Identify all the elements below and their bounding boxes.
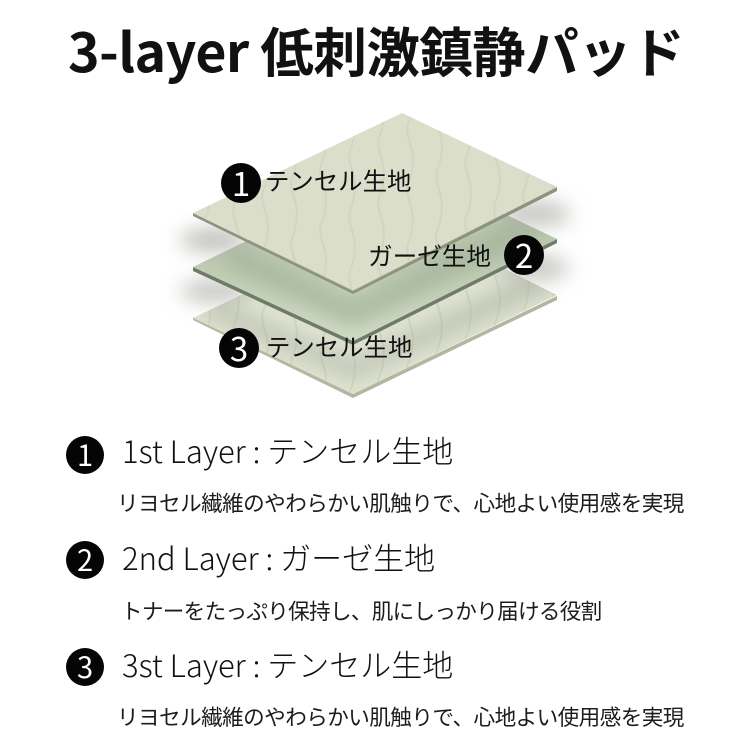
- title: 3-layer 低刺激鎮静パッド: [68, 11, 684, 88]
- shadow under layer 2: [180, 280, 252, 302]
- diagram label 2: ガーゼ生地: [368, 237, 491, 273]
- item 1: [66, 427, 684, 518]
- diagram label 3: 3: [230, 323, 248, 371]
- diagram label 1: 1: [232, 158, 250, 206]
- diagram label 2: [368, 230, 544, 278]
- shadow under layer 1: [180, 229, 248, 251]
- item 3 heading: 3st Layer : テンセル生地: [122, 641, 453, 686]
- diagram label 2: 2: [515, 230, 533, 278]
- icon: number 2: [66, 541, 104, 579]
- icon: number 3: [66, 648, 104, 686]
- icon: number 1: [66, 436, 104, 474]
- item 3: [66, 641, 684, 732]
- diagram label 3: [219, 323, 412, 371]
- icon: number 1: 1: [77, 433, 93, 475]
- item 1 heading: 1st Layer : テンセル生地: [122, 427, 453, 472]
- layer 1: top tencel: [193, 113, 557, 294]
- diagram label 3: テンセル生地: [266, 329, 412, 364]
- item 1 description: リヨセル繊維のやわらかい肌触りで、心地よい使用感を実現: [117, 487, 684, 518]
- layered pad illustration: [174, 113, 576, 398]
- diagram label 1: [221, 158, 411, 206]
- icon: number 3: 3: [77, 645, 93, 687]
- layer 2: middle gauze: [193, 214, 557, 344]
- diagram label 1: テンセル生地: [265, 163, 411, 198]
- item 2 description: トナーをたっぷり保持し、肌にしっかり届ける役割: [121, 595, 602, 626]
- item 2: [66, 534, 602, 626]
- layer 3: bottom tencel: [193, 269, 557, 398]
- item 2 heading: 2nd Layer : ガーゼ生地: [122, 534, 435, 579]
- item 3 description: リヨセル繊維のやわらかい肌触りで、心地よい使用感を実現: [117, 701, 684, 732]
- icon: number 2: 2: [77, 538, 93, 580]
